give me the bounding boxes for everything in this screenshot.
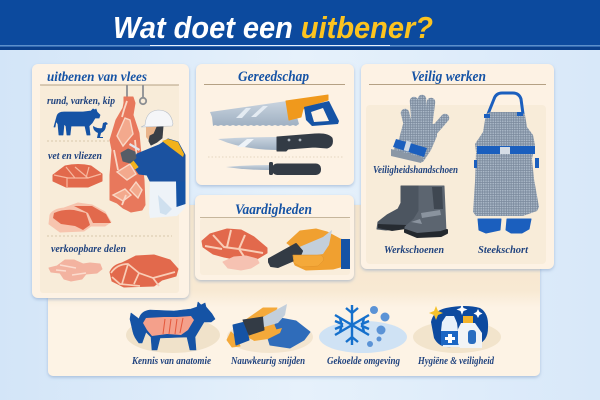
icon: chainmail apron <box>473 93 539 233</box>
divider <box>208 156 343 158</box>
icon: meat hooks <box>127 85 146 104</box>
label: kennis van anatomie: Kennis van anatomie <box>131 356 211 367</box>
divider <box>47 235 172 237</box>
skill: hygiene en veiligheid <box>413 304 501 367</box>
butcher helmet <box>141 110 173 127</box>
label: gekoelde omgeving: Gekoelde omgeving <box>327 356 400 367</box>
butcher glove <box>121 149 136 163</box>
icon: chicken silhouette <box>93 122 108 138</box>
illustration: hanging carcass <box>110 97 145 212</box>
illustration: meat cut 3 <box>110 255 178 287</box>
icon: boning knife <box>218 134 332 151</box>
illustration: fat piece <box>223 256 259 270</box>
icon: small ice crystals <box>367 306 390 347</box>
icon: spray bottle <box>441 316 460 347</box>
icon: cow anatomy <box>130 302 215 350</box>
icon: work boots <box>377 186 447 237</box>
heading: uitbenen van vlees: uitbenen van vlees <box>47 69 147 84</box>
skill: nauwkeurig snijden <box>227 304 313 367</box>
heading: gereedschap: Gereedschap <box>238 69 309 85</box>
butcher torso and arm <box>131 139 185 181</box>
label: verkoopbare delen: verkoopbare delen <box>51 244 126 255</box>
butcher knife <box>129 143 140 151</box>
butcher apron <box>149 180 185 218</box>
label: vet en vliezen: vet en vliezen <box>48 151 102 162</box>
illustration: butcher <box>121 110 186 218</box>
label: werkschoenen: Werkschoenen <box>384 245 444 256</box>
skill: kennis van anatomie <box>126 302 220 367</box>
divider <box>47 140 110 142</box>
butcher face <box>146 125 163 143</box>
illustration: meat cut 2 <box>49 203 111 232</box>
icon: snowflake <box>335 305 369 345</box>
label: veiligheidshandschoen: Veiligheidshandschoen <box>373 165 458 176</box>
panel: veilig werken <box>361 64 554 269</box>
label: hygiene en veiligheid: Hygiëne & veiligheid <box>417 356 495 367</box>
heading: vaardigheden: Vaardigheden <box>235 202 312 218</box>
illustration: meat cut 1 <box>53 164 102 187</box>
icon: chainmail glove <box>391 99 445 163</box>
backdrop: lower skills panel <box>48 205 540 376</box>
heading: veilig werken: Veilig werken <box>411 69 486 85</box>
illustration: fat trimmings <box>49 260 102 281</box>
illustration: meat <box>202 229 267 260</box>
label: nauwkeurig snijden: Nauwkeurig snijden <box>230 356 305 367</box>
panel: gereedschap <box>196 64 354 185</box>
icon: cow silhouette <box>54 109 100 135</box>
header band <box>0 0 600 50</box>
panel: uitbenen van vlees <box>32 64 189 298</box>
icon: small knife <box>226 162 321 175</box>
icon: detergent bottle <box>458 316 482 348</box>
icon: blue blob <box>431 306 488 347</box>
icon: hand and knife <box>227 304 310 348</box>
label: rund, varken, kip: rund, varken, kip <box>47 96 115 107</box>
title: Wat doet een uitbener? <box>113 10 433 45</box>
icon: hand saw <box>210 95 339 126</box>
icon: sparkles <box>429 304 482 320</box>
label: steekschort: Steekschort <box>478 245 529 256</box>
panel: vaardigheden <box>195 195 354 280</box>
illustration: hand with knife <box>269 229 350 270</box>
skill: gekoelde omgeving <box>319 305 407 367</box>
